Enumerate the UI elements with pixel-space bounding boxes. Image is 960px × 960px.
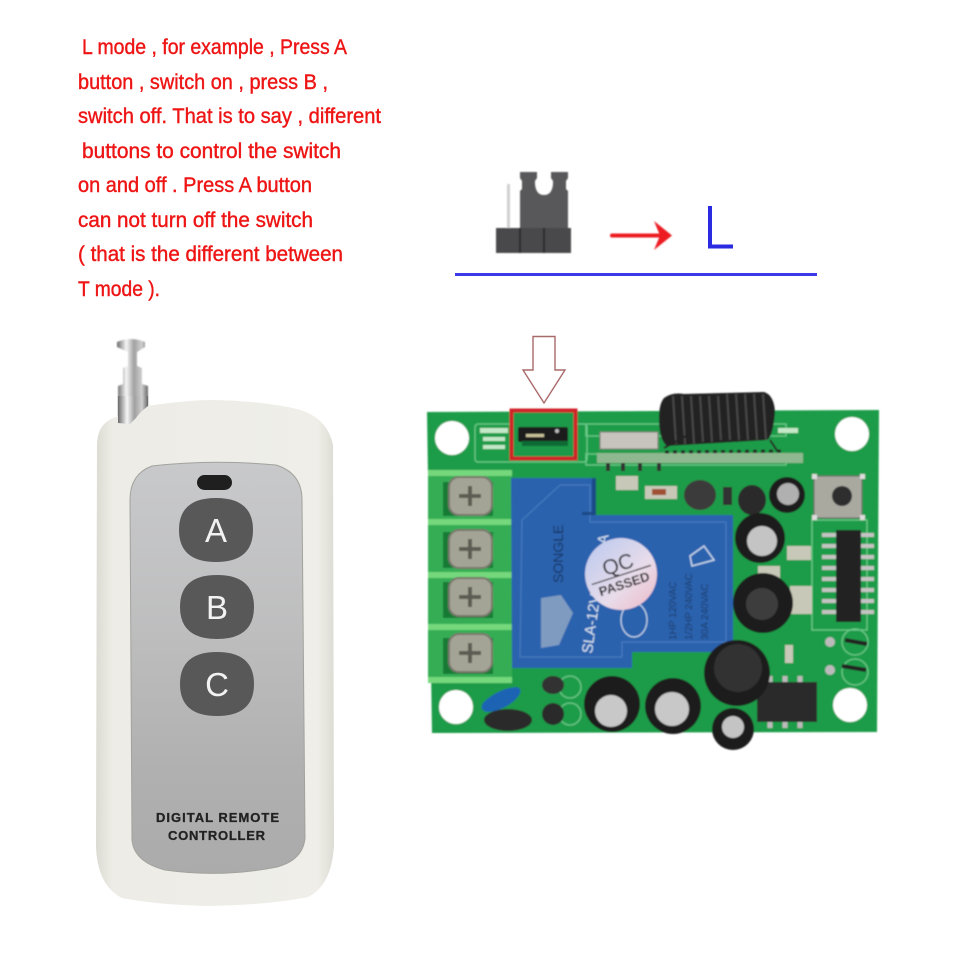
silver panel	[130, 462, 305, 873]
small components	[616, 476, 867, 675]
PCB trace details	[475, 424, 868, 725]
text block: L mode explanation: L mode , for example , Press A	[82, 36, 347, 59]
QC passed sticker	[585, 538, 657, 610]
remote label: CONTROLLER	[168, 828, 266, 843]
LED	[197, 475, 232, 490]
text block: L mode explanation	[78, 36, 381, 301]
PCB base	[427, 410, 879, 733]
relay: SLA-12VDC-SL-A	[579, 533, 613, 655]
icon: jumper cap	[496, 172, 571, 253]
remote label	[156, 810, 279, 843]
relay: SONGLE	[550, 525, 566, 583]
arrow: red right arrow	[612, 221, 672, 250]
text block: L mode explanation: on and off . Press A button	[78, 174, 312, 197]
text block: L mode explanation: button , switch on , press B ,	[78, 71, 328, 94]
jumper highlight	[512, 410, 576, 458]
push button	[812, 474, 865, 520]
remote control	[96, 339, 334, 906]
label: L	[710, 206, 733, 246]
button A	[179, 498, 253, 562]
relay: 1/2HP 240VAC	[684, 573, 695, 640]
small IC	[757, 676, 817, 728]
mounting holes	[435, 417, 869, 724]
text block: L mode explanation: buttons to control the switch	[82, 140, 341, 163]
antenna coil	[659, 392, 778, 452]
silkscreen labels	[480, 428, 798, 449]
arrow: outlined down arrow	[523, 336, 565, 403]
button B: B	[206, 589, 228, 626]
blue and black disc components	[482, 676, 564, 731]
divider: blue underline	[455, 273, 817, 276]
relay	[511, 478, 733, 668]
text block: L mode explanation: ( that is the different between	[78, 243, 343, 266]
text block: L mode explanation: can not turn off the switch	[78, 209, 313, 232]
QC passed sticker: QC	[600, 549, 637, 581]
circuit board	[427, 392, 879, 750]
icon: telescopic antenna	[117, 339, 148, 416]
terminal block	[428, 471, 512, 682]
electrolytic capacitors	[584, 477, 805, 750]
button C: C	[205, 666, 229, 703]
relay: 30A 240VAC	[700, 583, 711, 640]
button B	[180, 575, 254, 639]
button C	[180, 652, 254, 716]
text block: L mode explanation: T mode ).	[78, 278, 160, 301]
antenna base overlap	[118, 396, 148, 424]
relay: 1HP 120VAC	[668, 581, 679, 640]
IC chip	[822, 530, 874, 622]
remote label: DIGITAL REMOTE	[156, 810, 279, 825]
text block: L mode explanation: switch off. That is to say , different	[78, 105, 381, 128]
remote body	[96, 400, 334, 906]
button A: A	[205, 512, 227, 549]
QC passed sticker: PASSED	[597, 569, 652, 599]
receiver module and crystal	[597, 432, 803, 471]
